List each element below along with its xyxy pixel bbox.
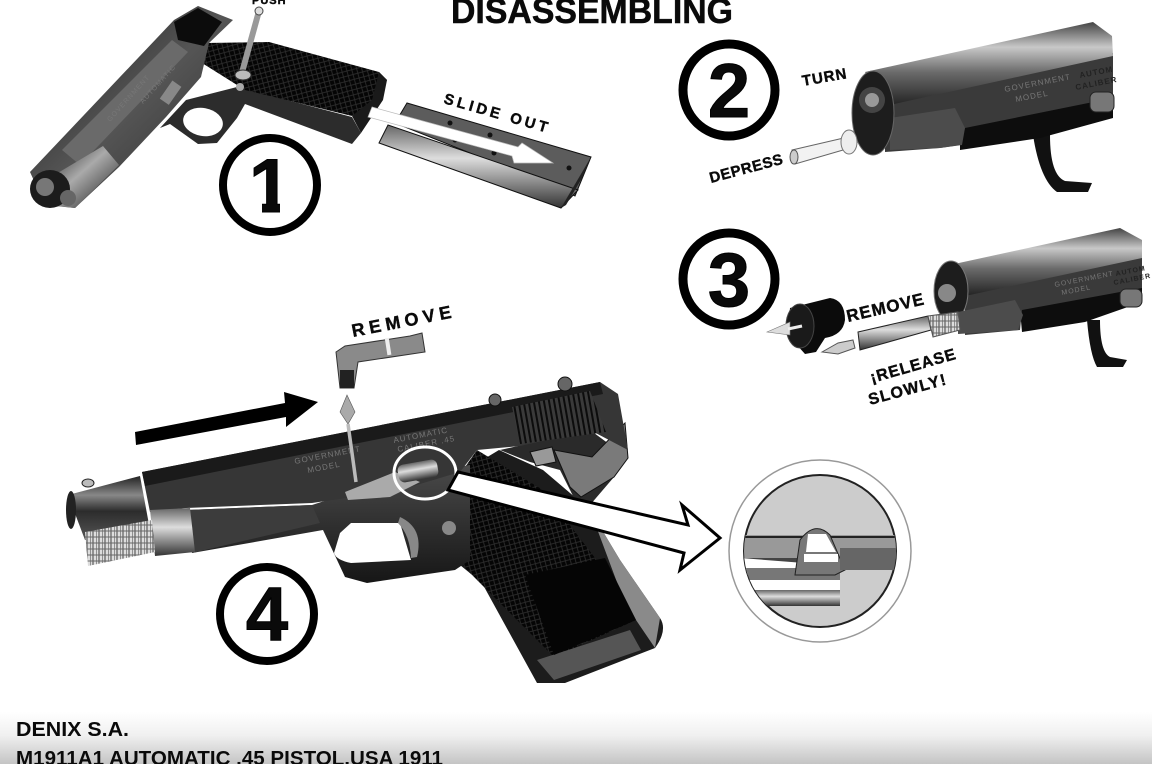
panel: step 1 pistol and magazine — [30, 0, 591, 232]
badge: 2: 2 — [708, 49, 750, 134]
label: slowly: SLOWLY! — [867, 372, 949, 409]
slide assembly 2: CALIBER — [1075, 75, 1118, 92]
guide line and arrow tip — [340, 395, 356, 482]
slide assembly 2: GOVERNMENT — [1004, 72, 1071, 94]
frame — [160, 87, 361, 144]
rear frame tang — [500, 430, 628, 505]
black arrow — [135, 392, 318, 445]
white arrow to detail — [448, 472, 720, 570]
panel: step 3 — [683, 228, 1152, 409]
panel: step 4 — [66, 301, 911, 683]
pistol 4: AUTOMATIC — [393, 426, 449, 445]
footer text: maker: DENIX S.A. — [16, 719, 129, 741]
plug — [767, 298, 845, 354]
footer background — [0, 712, 1152, 764]
pistol 1: AUTOMATIC — [139, 64, 178, 105]
engraving: GOVERNMENT — [106, 74, 152, 123]
slide assembly 3: AUTOM — [1115, 265, 1146, 278]
magazine — [379, 103, 591, 208]
grip frame — [438, 450, 663, 683]
arrow: slide out — [368, 107, 553, 163]
hammer — [554, 423, 628, 497]
pistol 4: MODEL — [307, 460, 341, 475]
slide assembly 2: AUTOM — [1079, 65, 1114, 80]
badge: 2 — [683, 44, 775, 136]
recoil spring guide — [822, 312, 960, 354]
slide — [30, 6, 233, 208]
engraving: GOVERNMENT — [294, 444, 361, 466]
sights — [489, 394, 501, 406]
slide stop part — [336, 333, 425, 388]
panel: step 2 — [683, 22, 1118, 192]
pin — [241, 11, 259, 76]
pistol 4: CALIBER .45 — [397, 434, 456, 454]
badge: 3: 3 — [708, 238, 750, 323]
label: depress: DEPRESS — [708, 151, 785, 187]
badge: 1 — [223, 138, 317, 232]
slide assembly 3 — [934, 228, 1152, 367]
slide assembly 3: GOVERNMENT — [1054, 271, 1114, 289]
grip — [202, 42, 387, 116]
label: slide out: SLIDE OUT — [442, 91, 553, 137]
muzzle and barrel bushing — [68, 476, 150, 540]
detail magnifier — [729, 460, 911, 642]
badge: 3 — [683, 233, 775, 325]
badge: 4 — [220, 567, 314, 661]
label: release: ¡RELEASE — [868, 346, 959, 387]
magnifier ring marker — [394, 447, 456, 499]
badge: 4: 4 — [246, 572, 288, 657]
slide assembly 3: MODEL — [1061, 284, 1092, 297]
muzzle — [48, 146, 119, 208]
frame and trigger guard — [186, 465, 470, 583]
slide assembly 3: CALIBER — [1113, 273, 1152, 287]
pistol 1 — [30, 6, 387, 208]
bushing pin — [790, 130, 857, 164]
slide assembly 2: MODEL — [1015, 89, 1049, 104]
label: turn: TURN — [801, 65, 849, 90]
badge: 1: 1 — [249, 144, 291, 229]
label: remove: REMOVE — [350, 301, 457, 341]
slide assembly 2 — [852, 22, 1118, 192]
label: remove: REMOVE — [845, 289, 927, 326]
pistol 4 — [66, 377, 663, 683]
slide — [142, 382, 628, 512]
